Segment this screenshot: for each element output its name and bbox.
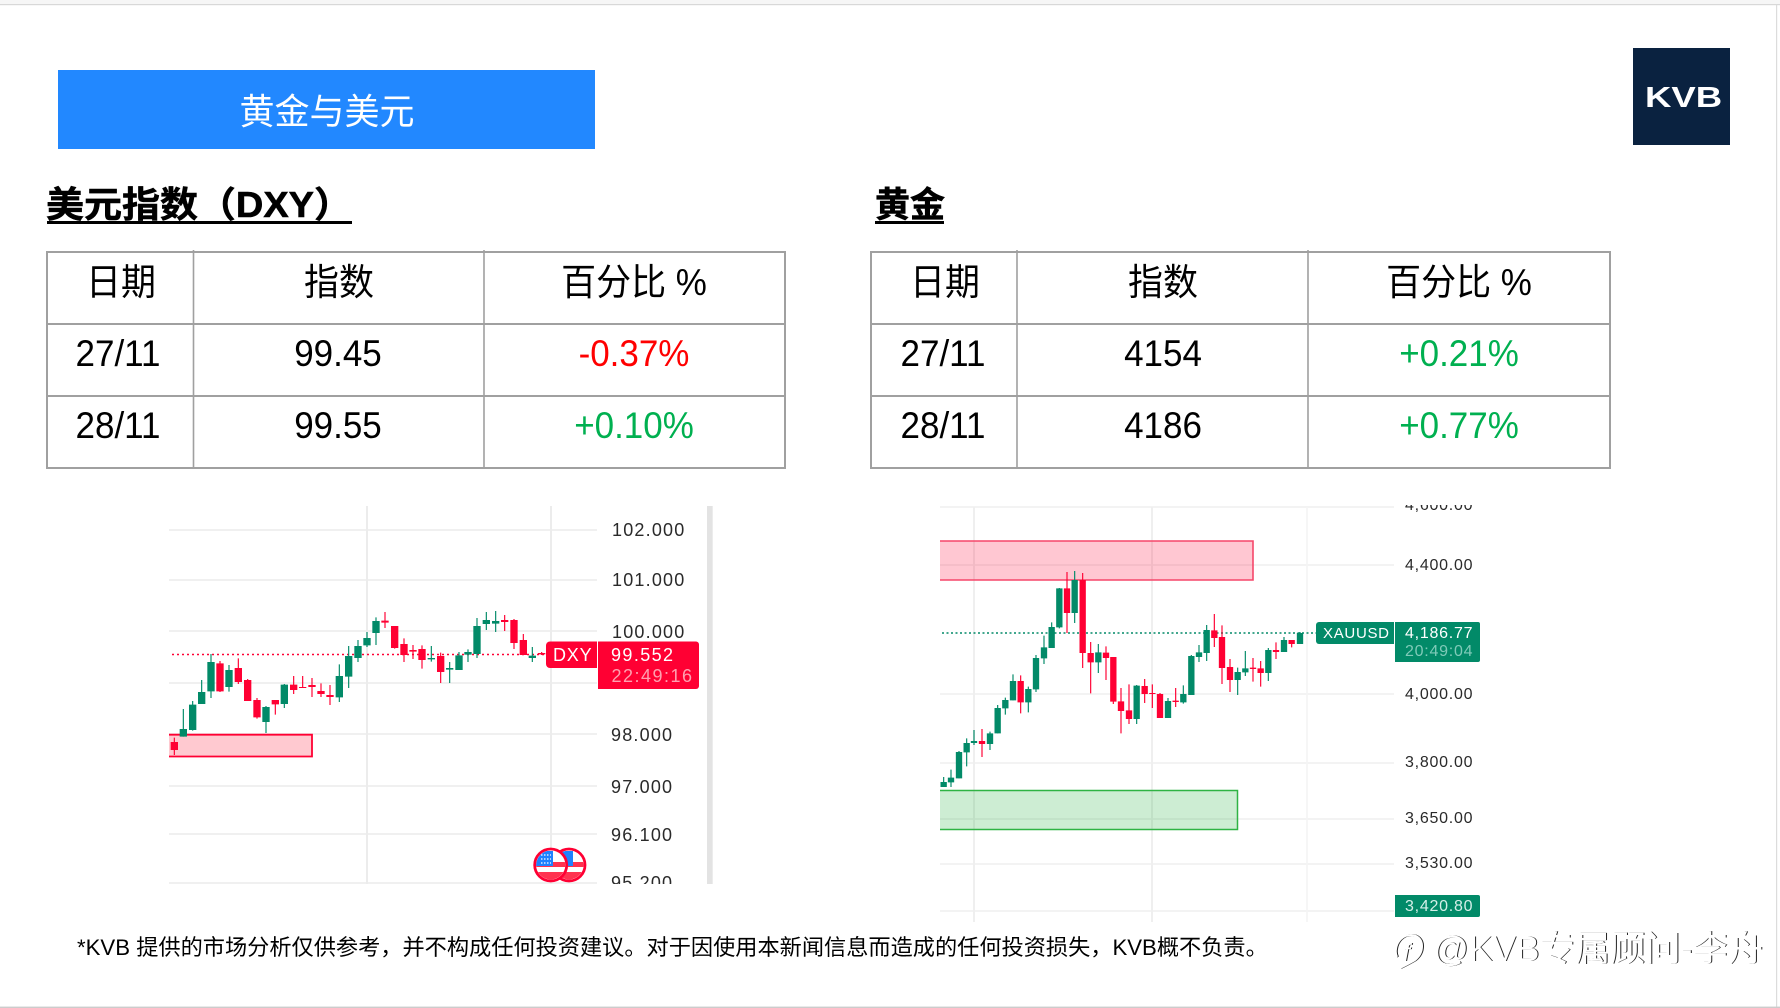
axis labels [1405, 497, 1473, 872]
candles right [385, 611, 542, 683]
table: DXY: 日期 [86, 262, 156, 303]
table: DXY: 28/11 [76, 404, 160, 446]
heading: gold: 黄金 [875, 186, 945, 225]
axis labels: 97.000 [611, 777, 673, 797]
candles left [944, 571, 1121, 787]
candles right [1129, 614, 1300, 724]
axis labels: 3,800.00 [1405, 754, 1473, 771]
tag: last price: 4,186.77 [1405, 625, 1473, 642]
table: gold: 百分比 % [1386, 262, 1532, 303]
tag: last price: 20:49:04 [1405, 643, 1473, 660]
heading: DXY: 美元指数（DXY） [46, 185, 352, 225]
resistance zone [930, 541, 1253, 580]
axis labels: 4,400.00 [1405, 557, 1473, 574]
axis labels [611, 520, 685, 893]
candles left [174, 617, 376, 755]
tag: DXY [546, 642, 597, 668]
axis labels: 3,530.00 [1405, 855, 1473, 872]
table: DXY: 99.45 [294, 332, 382, 374]
title banner: 黄金与美元 [240, 92, 414, 132]
disclaimer: *KVB 提供的市场分析仅供参考，并不构成任何投资建议。对于因使用本新闻信息而造成的任何投资损失，KVB概不负责。 [77, 935, 1268, 960]
support zone [930, 790, 1238, 830]
axis labels: 3,650.00 [1405, 810, 1473, 827]
table: gold: 28/11 [901, 404, 985, 446]
tag: low price: 3,420.80 [1405, 898, 1473, 915]
icon: US flags [535, 849, 585, 881]
axis labels: 4,000.00 [1405, 686, 1473, 703]
table: gold: +0.21% [1399, 332, 1519, 374]
table: gold: 指数 [1128, 262, 1198, 303]
table: DXY: 指数 [304, 262, 374, 303]
table: gold: +0.77% [1399, 404, 1519, 446]
title banner [58, 70, 595, 149]
axis labels: 4,600.00 [1405, 497, 1473, 514]
tag: last price [1395, 622, 1480, 662]
tag: last price: 99.552 [611, 645, 674, 665]
support zone [160, 735, 312, 756]
axis labels: 100.000 [612, 622, 685, 642]
table: gold: 27/11 [901, 332, 985, 374]
logo: KVB: KVB [1645, 81, 1722, 113]
tag: last price: 22:49:16 [612, 666, 694, 686]
axis labels: 98.000 [611, 725, 673, 745]
table: gold [871, 250, 1610, 468]
watermark: @KVB专属顾问-李舟 [1433, 930, 1763, 969]
chart: gold candlesticks [930, 497, 1480, 922]
table: gold: 4154 [1124, 332, 1202, 374]
table: DXY: +0.10% [574, 404, 694, 446]
table: DXY: 27/11 [76, 332, 160, 374]
price line [942, 632, 1316, 634]
axis labels: 101.000 [612, 570, 685, 590]
tag: DXY: DXY [553, 645, 592, 665]
chart: DXY candlesticks [160, 506, 713, 893]
table: DXY: 百分比 % [561, 262, 707, 303]
price line [172, 654, 546, 656]
icon: zhihu bubble [1396, 935, 1422, 968]
table: DXY: 99.55 [294, 404, 382, 446]
tag: XAUUSD [1316, 622, 1394, 644]
table: DXY: -0.37% [579, 332, 689, 374]
tag: XAUUSD: XAUUSD [1323, 625, 1390, 642]
tag: low price [1395, 895, 1480, 917]
tag: last price [598, 642, 699, 689]
table: DXY [47, 250, 785, 468]
axis labels: 96.100 [611, 825, 673, 845]
axis labels: 102.000 [612, 520, 685, 540]
logo: KVB [1633, 48, 1730, 145]
table: gold: 4186 [1124, 404, 1202, 446]
axis labels: 95.200 [611, 873, 673, 893]
icon: zhihu bubble: f [1403, 939, 1413, 967]
table: gold: 日期 [910, 262, 980, 303]
